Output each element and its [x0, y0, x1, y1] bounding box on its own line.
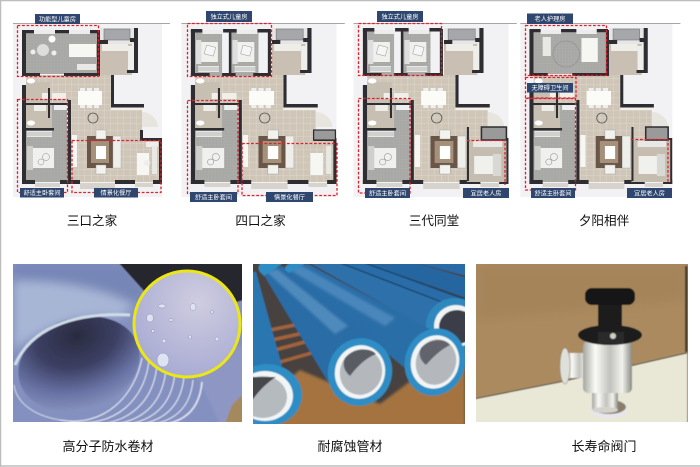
floor plan: three generations [354, 24, 517, 197]
caption: three-person family: 三口之家 [67, 213, 118, 228]
knob [585, 288, 635, 305]
tag: elder room: 宜居老人房 [471, 190, 501, 198]
floor plan: sunset companionship [520, 24, 680, 197]
black flange [578, 325, 642, 345]
side port [566, 353, 590, 378]
photo: long-life valve [476, 264, 688, 422]
tag: elder care room [527, 14, 573, 24]
tag: multifunctional child room: 功能型儿童房 [39, 16, 76, 24]
tag: elder room [627, 188, 672, 198]
tag: scenic hall [266, 192, 313, 202]
tag: barrier-free bathroom: 无障碍卫生间 [531, 84, 569, 92]
tag: master suite [531, 188, 575, 198]
tag: multifunctional child room [35, 14, 80, 24]
pipe 3 opening [426, 298, 484, 352]
tag: independent child room: 独立式儿童房 [381, 13, 419, 21]
tag: master suite [20, 188, 64, 198]
tag: barrier-free bathroom [527, 83, 573, 92]
red zones: four-person family [188, 24, 337, 196]
photo: corrosion-resistant pipes [253, 264, 465, 424]
red zones: sunset companionship [526, 26, 668, 190]
caption: polymer membrane: 高分子防水卷材 [62, 439, 154, 454]
tag: independent child room [377, 11, 423, 22]
caption: three generations: 三代同堂 [409, 214, 459, 228]
membrane hole [6, 301, 152, 427]
tag: independent child room: 独立式儿童房 [210, 13, 248, 21]
tag: scenic hall [94, 188, 138, 198]
pipe 2 [285, 264, 435, 368]
photo: polymer waterproof membrane [13, 264, 242, 422]
tag: elder room [463, 188, 509, 198]
tag: elder room: 宜居老人房 [634, 190, 665, 198]
tag: master suite: 舒适主卧套间 [195, 194, 232, 202]
stem [598, 302, 622, 326]
tag: master suite [190, 192, 237, 202]
floor plan: three-person family [13, 24, 170, 197]
caption: valve: 长寿命阀门 [571, 439, 637, 454]
base flange [590, 400, 628, 418]
floor plan: four-person family [182, 24, 345, 197]
tag: elder care room: 老人护理房 [535, 15, 565, 23]
back pipes [412, 262, 467, 276]
red zones: three-person family [18, 26, 161, 192]
red zones: three generations [358, 24, 505, 193]
tag: master suite: 舒适主卧套间 [369, 190, 406, 198]
caption: four-person family: 四口之家 [235, 213, 286, 228]
tag: master suite: 舒适主卧套间 [23, 189, 61, 197]
pipe 1 [262, 266, 388, 385]
tag: master suite [365, 188, 410, 198]
upper rim [15, 315, 130, 365]
tag: scenic hall: 情景化餐厅 [101, 189, 131, 197]
tag: independent child room [206, 11, 252, 22]
caption: sunset companionship: 夕阳相伴 [579, 214, 630, 228]
tag: scenic hall: 情景化餐厅 [274, 194, 305, 202]
pipe left [251, 272, 282, 372]
tag: master suite: 舒适主卧套间 [534, 190, 572, 198]
stands [270, 323, 322, 362]
body [583, 341, 632, 393]
caption: pipes: 耐腐蚀管材 [317, 439, 383, 454]
